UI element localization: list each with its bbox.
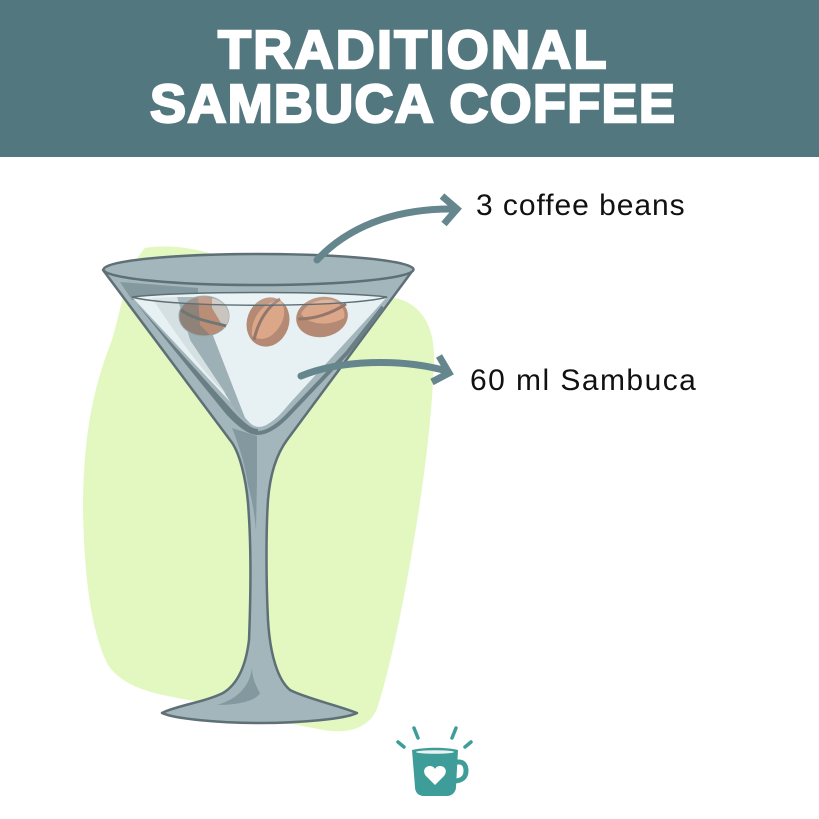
title line 2: SAMBUCA COFFEE — [150, 74, 676, 134]
mug heart — [424, 766, 446, 785]
glass rim — [104, 254, 414, 285]
arrow to sambuca — [301, 356, 449, 382]
coffee bean left — [179, 296, 229, 336]
stem shadow — [232, 428, 257, 530]
mug body — [412, 748, 458, 796]
coffee bean right — [293, 293, 351, 341]
bowl shadow — [120, 282, 198, 300]
header banner — [0, 0, 819, 157]
sambuca liquid — [132, 292, 387, 427]
base shadow — [217, 667, 260, 705]
martini glass — [103, 254, 414, 723]
green background blob — [83, 246, 434, 731]
logo: coffee mug — [398, 728, 471, 796]
bowl inner edge left — [136, 303, 258, 435]
liquid shadow band — [177, 297, 247, 423]
bowl inner edge right — [258, 307, 383, 433]
coffee bean middle — [240, 291, 296, 353]
label: 60 ml Sambuca: 60 ml Sambuca — [470, 364, 697, 397]
mug rays — [398, 728, 471, 747]
mug opening — [416, 750, 454, 754]
liquid highlight — [152, 297, 226, 394]
title line 1: TRADITIONAL — [218, 20, 609, 80]
mug handle — [454, 762, 466, 781]
arrow to coffee beans — [317, 196, 457, 260]
label: 3 coffee beans: 3 coffee beans — [476, 189, 686, 222]
liquid surface — [132, 292, 387, 305]
glass silhouette — [103, 270, 413, 723]
